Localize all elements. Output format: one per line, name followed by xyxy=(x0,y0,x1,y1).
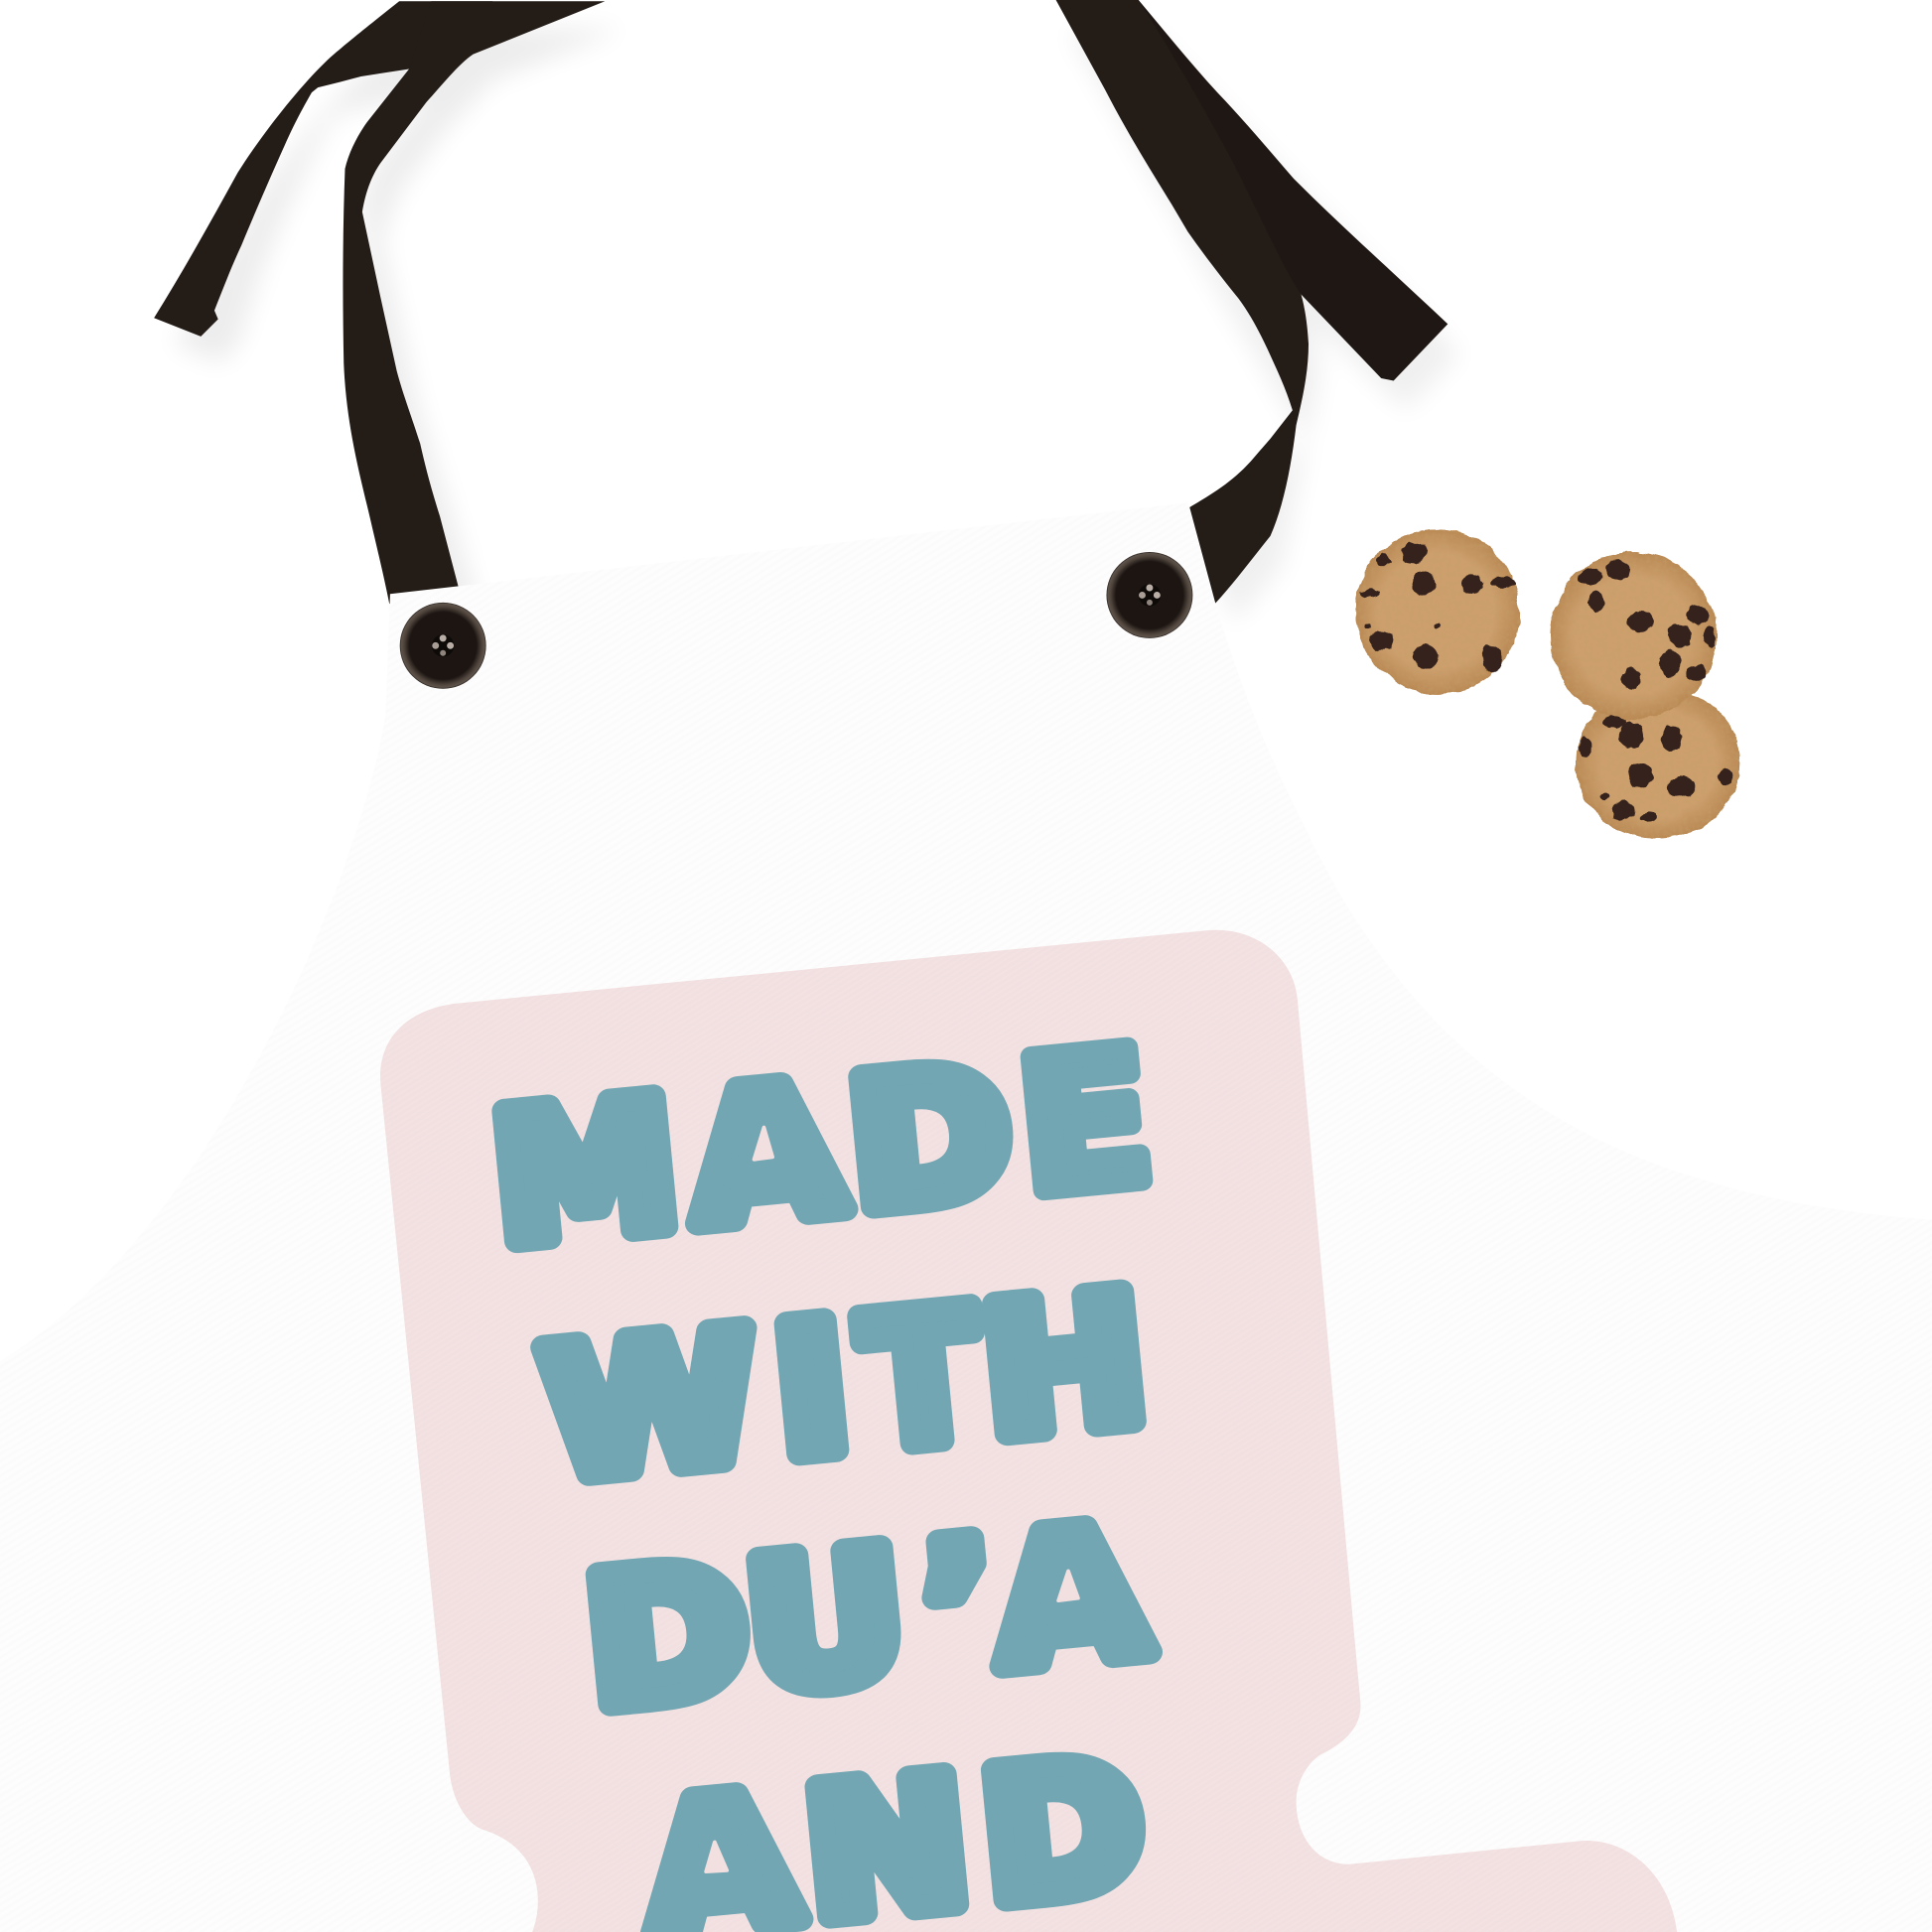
letter counters: A shapes xyxy=(706,1128,1078,1871)
word: MADE: M xyxy=(484,1060,687,1285)
cookie: left xyxy=(1355,529,1520,694)
word: WITH: WI xyxy=(534,1284,858,1520)
neck strap: right xyxy=(1056,0,1460,623)
word: DU'A: DU’A xyxy=(578,1488,1155,1748)
cookie: lower right xyxy=(1575,687,1740,839)
heading: made with du'a and xyxy=(483,1011,1161,1932)
word: MADE xyxy=(483,1011,1161,1286)
neck strap: left xyxy=(154,1,624,620)
word: WITH xyxy=(534,1255,1155,1520)
word: MADE: E xyxy=(1011,1011,1161,1235)
word: WITH: H xyxy=(974,1255,1155,1478)
cookie: upper right xyxy=(1550,552,1717,719)
word: MADE: AD xyxy=(681,1029,1020,1266)
icon: left button xyxy=(400,603,486,689)
icon: cookies xyxy=(1355,529,1740,839)
icon: right button xyxy=(1106,552,1192,638)
panel: pink printed shape xyxy=(380,930,1677,1932)
word: WITH: T xyxy=(855,1272,989,1489)
apron body xyxy=(0,502,1932,1932)
